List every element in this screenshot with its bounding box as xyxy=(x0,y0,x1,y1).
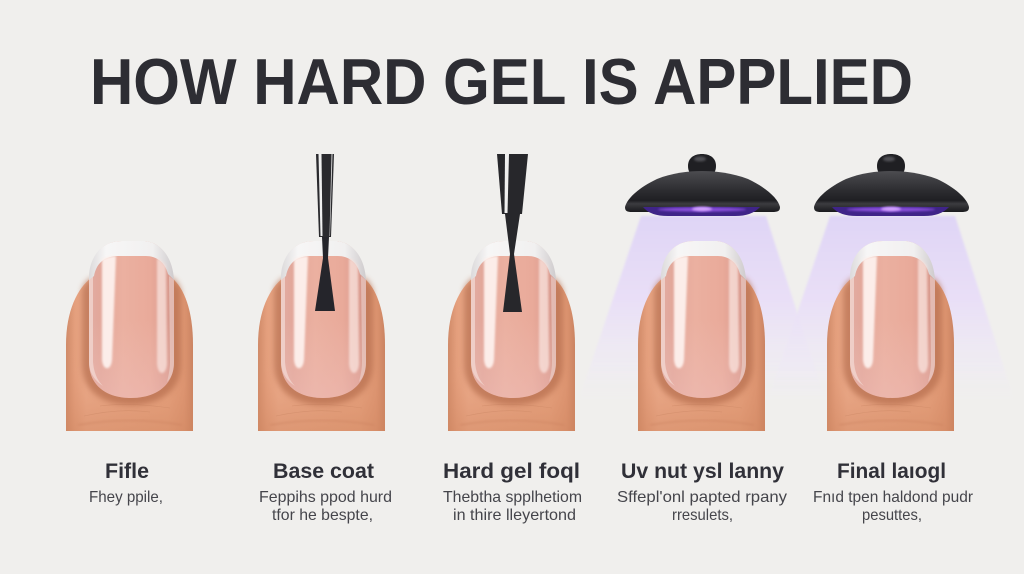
step 3 heading: Hard gel foql xyxy=(443,460,580,483)
icon: uv lamp with light beam xyxy=(578,154,826,402)
step 2 heading: Base coat xyxy=(273,460,374,483)
step 5 heading: Final laıogl xyxy=(837,460,946,483)
step 4 description: Sffepl'onl papted rpany xyxy=(617,489,787,506)
step 2: base coat xyxy=(258,154,392,524)
step 2 description: tfor he bespte, xyxy=(272,507,373,524)
step 5 description xyxy=(813,489,974,524)
nail illustration: base coat nail xyxy=(258,241,385,431)
step 3: hard gel xyxy=(443,154,582,524)
title: HOW HARD GEL IS APPLIED xyxy=(90,45,913,118)
step 1 heading: Fifle xyxy=(105,460,149,483)
step 2 description xyxy=(259,489,392,524)
icon: tapered brush xyxy=(497,154,528,312)
step 5 description: Fnıd tpen haldond pudr xyxy=(813,489,974,506)
step 4 description xyxy=(617,489,787,524)
step 3 description xyxy=(443,489,582,524)
nail illustration: curing nail xyxy=(638,241,765,431)
step 5: final xyxy=(767,154,1015,524)
nail illustration: hard gel nail xyxy=(448,241,575,431)
icon: second uv lamp with light beam xyxy=(767,154,1015,402)
step 2 description: Feppihs ppod hurd xyxy=(259,489,392,506)
step 5 description: pesuttes, xyxy=(862,507,922,524)
icon: thin brush xyxy=(315,154,335,311)
step 3 description: Thebtha spplhetiom xyxy=(443,489,582,506)
step 3 description: in thire lleyertond xyxy=(453,507,576,524)
nail illustration: finished nail xyxy=(827,241,954,431)
step 4 description: rresulets, xyxy=(672,507,733,524)
step 1 description: Fhey ppile, xyxy=(89,489,163,506)
step 1: file xyxy=(66,241,193,506)
nail illustration: filed nail xyxy=(66,241,193,431)
step 4: uv lamp xyxy=(578,154,826,524)
step 4 heading: Uv nut ysl lanny xyxy=(621,460,784,483)
